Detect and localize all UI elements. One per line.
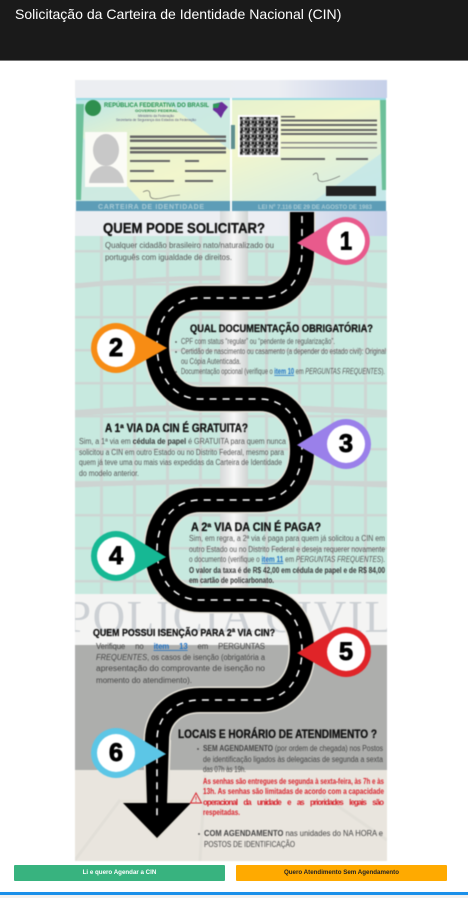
section 4: segunda via paga: A 2ª VIA DA CIN É PAGA? <box>191 521 321 534</box>
section 5: isenção: momento do atendimento). <box>96 676 192 685</box>
section 5: isenção: Verifique no item 13 em PERGUNTAS <box>96 642 265 651</box>
pin 4 <box>91 531 166 581</box>
section 1: quem pode solicitar: QUEM PODE SOLICITAR? <box>103 220 265 237</box>
button: agendar: Li e quero Agendar a CIN <box>83 869 156 876</box>
section 3: primeira via gratuita: Sim, a 1ª via em cédula de papel é GRATUITA para quem nunca <box>79 437 287 446</box>
section 5: isenção: FREQUENTES, os casos de isenção (obrigatória a <box>96 653 266 662</box>
button: agendar <box>14 865 225 881</box>
pin 4: 4 <box>109 542 123 570</box>
section 2: documentação obrigatória <box>175 322 386 376</box>
pin 1: 1 <box>340 228 352 256</box>
panel: building background: POLÍCIA CIVIL <box>66 592 392 642</box>
ID card image: CARTEIRA DE IDENTIDADE <box>98 204 204 211</box>
button: sem agendamento <box>236 865 447 881</box>
section 5: isenção: apresentação do comprovante de isenção no <box>96 664 266 673</box>
ID card image <box>76 98 386 211</box>
section 6: locais e horário: POSTOS DE IDENTIFICAÇÃO <box>204 840 295 849</box>
section 4: segunda via paga <box>189 521 386 585</box>
pin 1 <box>297 217 370 265</box>
pin 3 <box>297 419 371 469</box>
section 6: locais e horário: As senhas são entregues de segunda à sexta-feira, às 7h e às <box>203 777 385 786</box>
section 1: quem pode solicitar: português com igualdade de direitos. <box>105 252 232 262</box>
section 4: segunda via paga: O valor da taxa é de R$ 42,00 em cédula de papel e de R$ 84,00 <box>189 566 386 575</box>
ID card image: Ministério da Federação <box>138 114 174 118</box>
section 6: locais e horário: LOCAIS E HORÁRIO DE ATENDIMENTO ? <box>178 728 377 741</box>
section 2: documentação obrigatória: Certidão de nascimento ou casamento (a depender do estado civil): Original <box>181 347 386 356</box>
section 4: segunda via paga: em cartão de policarbonato. <box>189 576 274 585</box>
icon: warning triangle <box>190 793 202 803</box>
section 1: quem pode solicitar: Qualquer cidadão brasileiro nato/naturalizado ou <box>105 240 274 250</box>
pin 6 <box>91 728 166 778</box>
section 2: documentação obrigatória: CPF com status “regular” ou “pendente de regularização”. <box>181 337 335 346</box>
section 4: segunda via paga: outro Estado ou no Distrito Federal e deseja requerer novamente <box>189 545 385 554</box>
button: sem agendamento: Quero Atendimento Sem Agendamento <box>284 869 399 876</box>
section 6: locais e horário: das 07h às 19h. <box>203 765 246 774</box>
section 3: primeira via gratuita: solicitou a CIN em outro Estado ou no Distrito Federal, mesmo para <box>79 448 285 457</box>
section 4: segunda via paga: Sim, em regra, a 2ª via é paga para quem já solicitou a CIN em <box>189 534 385 543</box>
section 3: primeira via gratuita <box>79 422 287 478</box>
road with arrow <box>120 212 302 841</box>
section 3: primeira via gratuita: quem já teve uma ou mais vias expedidas da Carteira de Identidade <box>79 458 282 467</box>
panel: building background <box>66 80 392 861</box>
section 6: locais e horário: operacional da unidade e as prioridades legais são <box>203 798 384 807</box>
ID card image: LEI Nº 7.116 DE 29 DE AGOSTO DE 1983 <box>258 205 373 211</box>
pin 6: 6 <box>109 739 123 767</box>
section 4: segunda via paga: o documento (verifique o item 11 em PERGUNTAS FREQUENTES). <box>189 555 385 564</box>
footer blue line <box>0 892 468 898</box>
section 6: locais e horário: SEM AGENDAMENTO (por ordem de chegada) nos Postos <box>203 744 383 753</box>
section 6: locais e horário: COM AGENDAMENTO nas unidades do NA HORA e <box>204 829 383 838</box>
ID card image: REPÚBLICA FEDERATIVA DO BRASIL <box>104 102 209 109</box>
header bar with page title: Solicitação da Carteira de Identidade Nacional (CIN) <box>15 6 341 22</box>
section 3: primeira via gratuita: A 1ª VIA DA CIN É GRATUITA? <box>105 422 248 435</box>
pin 2: 2 <box>109 334 123 362</box>
ID card image: GOVERNO FEDERAL <box>135 108 179 113</box>
pin 2 <box>91 323 167 373</box>
section 3: primeira via gratuita: do modelo anterior. <box>79 469 139 478</box>
section 1: quem pode solicitar <box>103 220 274 262</box>
ID card image: Secretaria de Segurança dos Estados da Federação <box>116 118 196 122</box>
section 2: documentação obrigatória: QUAL DOCUMENTAÇÃO OBRIGATÓRIA? <box>190 322 373 335</box>
section 6: locais e horário: respeitadas. <box>203 808 240 817</box>
section 6: locais e horário: 13h. As senhas são limitadas de acordo com a capacidade <box>203 787 385 796</box>
section 6: locais e horário: de identificação ligados às delegacias de segunda a sexta <box>203 755 384 764</box>
infographic drawing <box>74 80 388 862</box>
section 5: isenção <box>93 626 275 685</box>
pin 5: 5 <box>339 638 353 666</box>
section 5: isenção: QUEM POSSUI ISENÇÃO PARA 2ª VIA CIN? <box>93 626 275 639</box>
pin 5 <box>297 627 371 677</box>
section 2: documentação obrigatória: Documentação opcional (verifique o item 10 em PERGUNTAS FREQUENTES). <box>181 367 385 376</box>
header bar with page title <box>0 0 468 61</box>
section 6: locais e horário <box>178 728 385 849</box>
section 2: documentação obrigatória: ou Cópia Autenticada. <box>181 357 241 366</box>
pin 3: 3 <box>339 430 353 458</box>
